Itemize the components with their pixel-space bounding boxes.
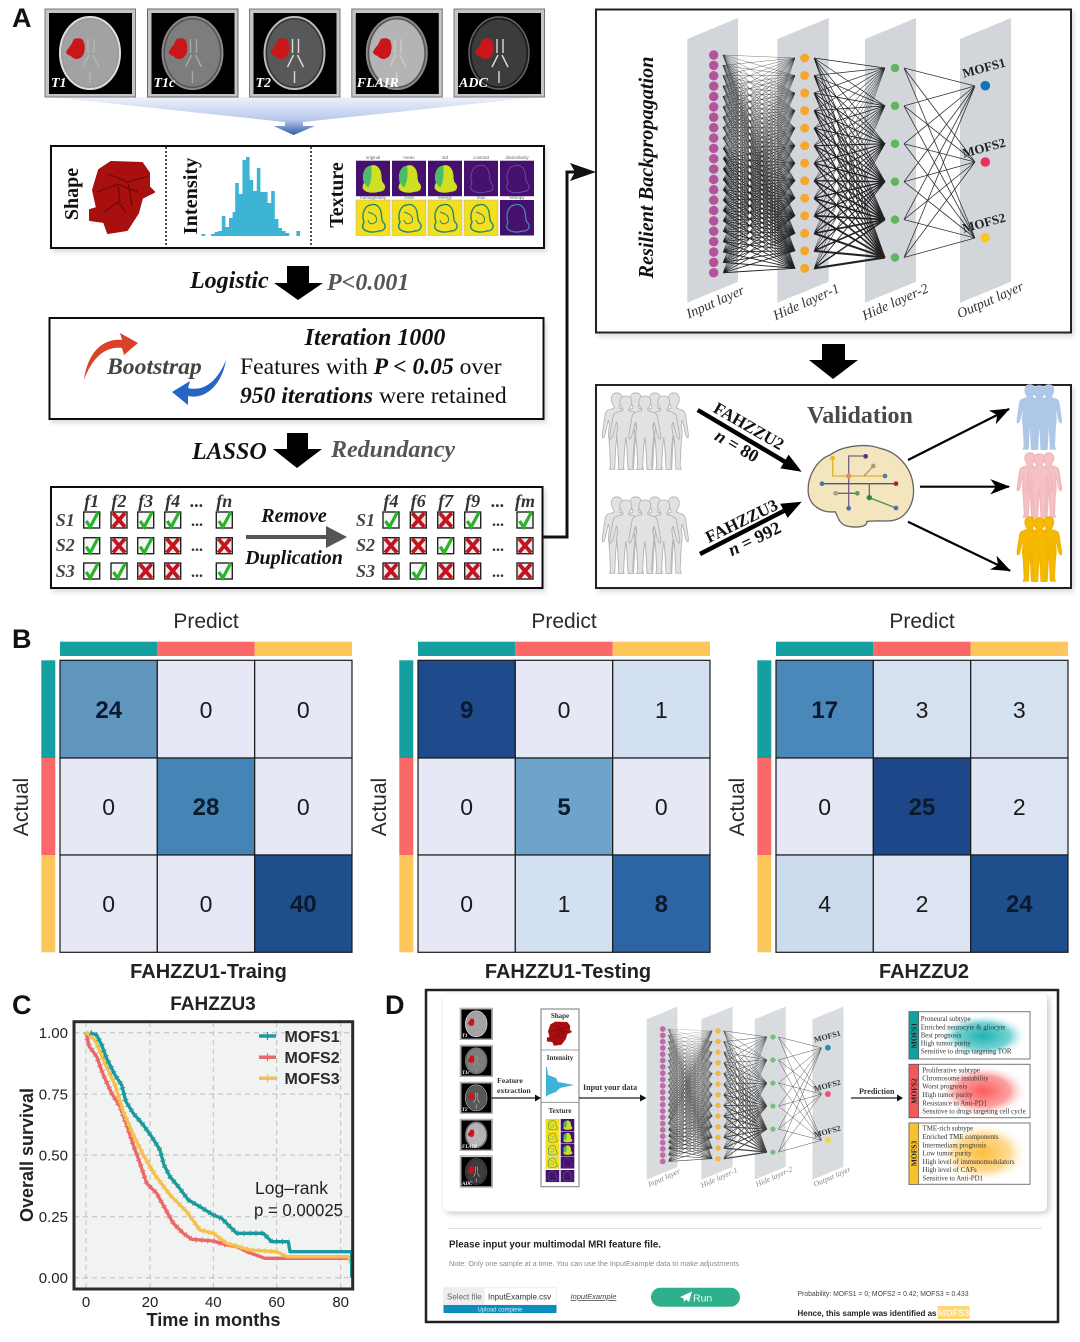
texture feature map grid: std [442, 155, 448, 160]
bootstrap box: Bootstrap [106, 354, 202, 380]
bootstrap box: Iteration 1000 [304, 325, 445, 351]
subtype card MOFS2: MOFS2 [910, 1078, 918, 1104]
left feature matrix: ... [190, 491, 204, 511]
MRI T1c: T1c [154, 76, 176, 91]
feature extraction arrow: extraction [497, 1086, 531, 1095]
cohort FAHZZU2 people [602, 393, 688, 469]
FAHZZU3 arrow: FAHZZU3 [702, 495, 781, 547]
texture feature map grid: ASM [404, 195, 414, 200]
matrix: training: 40 [290, 891, 317, 918]
network graph [687, 18, 1011, 486]
example link: InputExample [570, 1292, 616, 1301]
output labels: MOFS2 [961, 210, 1007, 236]
validation heading: Validation [807, 403, 913, 429]
output arrows [908, 409, 1010, 571]
MRI ADC: ADC [458, 76, 488, 91]
survival chart title: FAHZZU3 [170, 994, 256, 1015]
texture feature map grid: energy [438, 195, 453, 200]
subtype card MOFS2: High tumor purity [922, 1092, 973, 1099]
subtype card MOFS3 [909, 1123, 1030, 1184]
file selector [444, 1288, 556, 1314]
3D tumour shape [90, 162, 154, 233]
MRI T1c [148, 9, 238, 97]
log-rank annotation [254, 1178, 343, 1220]
input note: Note: Only one sample at a time. You can use the InputExample data to make adjustments [449, 1261, 740, 1268]
feature column: Intensity [547, 1054, 574, 1062]
matrix: testing: 0 [460, 794, 473, 820]
texture feature map grid: max [477, 195, 486, 200]
shape label: Shape [61, 168, 83, 220]
right feature matrix: f4 [384, 491, 398, 511]
run button: Run [693, 1292, 712, 1304]
mini MRI stack: T1c [462, 1071, 471, 1076]
FAHZZU2 arrow: n = 80 [712, 425, 762, 466]
remove duplication arrow: Duplication [244, 547, 343, 569]
x axis labels: 20 [142, 1294, 158, 1311]
FAHZZU3 arrow [700, 495, 802, 560]
right feature matrix: S3 [356, 561, 375, 581]
left feature matrix: S3 [56, 561, 75, 581]
down arrow [274, 266, 323, 300]
subtype card MOFS1: Proneural subtype [921, 1016, 971, 1023]
mini output labels: MOFS2 [813, 1124, 842, 1139]
right feature matrix: S1 [356, 510, 375, 530]
left feature matrix: f4 [165, 491, 180, 511]
y axis title: Overall survival [17, 1088, 37, 1222]
blue curved arrow [172, 360, 226, 405]
remove duplication arrow [244, 505, 347, 569]
matrix: FAHZZU2: Actual [726, 778, 749, 836]
left feature matrix: ... [191, 564, 203, 581]
MRI T1 [45, 9, 136, 97]
matrix: testing: FAHZZU1-Testing [485, 961, 651, 983]
input heading: Please input your multimodal MRI feature file. [449, 1240, 661, 1250]
matrix: testing: 0 [460, 891, 473, 917]
texture feature map grid: contrast [473, 155, 490, 160]
panel letter C: C [12, 990, 32, 1020]
x axis labels [82, 1294, 349, 1311]
FAHZZU2 arrow: FAHZZU2 [710, 398, 787, 454]
duplication removal box [51, 487, 542, 588]
logistic step: Logistic [189, 268, 269, 294]
result text: MOFS3 [938, 1308, 969, 1318]
output labels [961, 55, 1007, 236]
matrix: testing: 1 [655, 697, 668, 723]
result text: Hence, this sample was identified as [798, 1309, 937, 1318]
left feature matrix: f3 [138, 491, 153, 511]
subtype card MOFS2: Resistance to Anti-PD1 [922, 1100, 988, 1107]
matrix: FAHZZU2: 2 [1013, 794, 1026, 820]
bootstrap box [50, 318, 544, 419]
texture feature map grid: mean [403, 155, 415, 160]
matrix: training: 0 [200, 891, 212, 917]
prediction arrow: Prediction [859, 1087, 895, 1096]
right feature matrix: f9 [465, 491, 480, 511]
matrix: training: 0 [102, 891, 115, 917]
matrix: testing: Actual [368, 778, 391, 836]
legend: MOFS2 [284, 1050, 340, 1067]
layer labels: Hide layer-1 [770, 282, 842, 324]
right feature matrix: S2 [356, 535, 375, 555]
feature column: Texture [549, 1107, 571, 1115]
mini layer labels: Input layer [646, 1166, 682, 1189]
mini layer labels [646, 1164, 853, 1190]
subtype card MOFS1: MOFS1 [910, 1023, 918, 1048]
output labels: MOFS1 [961, 55, 1007, 81]
matrix: training: 28 [193, 794, 219, 821]
logistic step [189, 266, 409, 300]
intensity histogram [202, 157, 300, 236]
feature extraction arrow [492, 1076, 541, 1102]
survival curves [86, 1033, 352, 1278]
down arrow to validation [809, 344, 858, 379]
mini output labels: MOFS2 [813, 1078, 842, 1093]
matrix: testing: 9 [460, 697, 473, 724]
texture feature map grid: original [366, 155, 380, 160]
left feature matrix: f1 [84, 491, 99, 511]
MRI T1: T1 [51, 76, 67, 91]
feature column: Shape [551, 1012, 569, 1020]
legend: MOFS3 [284, 1071, 340, 1088]
network title: Resilient Backpropagation [634, 56, 658, 279]
matrix: FAHZZU2: 4 [818, 891, 831, 917]
matrix: FAHZZU2 [726, 610, 1068, 983]
survival chart [17, 1022, 353, 1330]
texture feature map grid: entropy [509, 195, 525, 200]
matrix: training [10, 610, 352, 983]
file selector: Upload complete [477, 1308, 523, 1314]
x axis labels: 80 [332, 1294, 349, 1311]
FAHZZU3 arrow: n = 992 [725, 517, 784, 560]
mini MRI stack: ADC [461, 1182, 473, 1187]
MRI T2 [250, 9, 340, 97]
log-rank annotation: Log–rank [255, 1178, 328, 1198]
layer labels: Hide layer-2 [859, 282, 931, 324]
mini MRI stack: FLAIR [462, 1145, 478, 1150]
mini output labels: MOFS1 [813, 1029, 842, 1044]
red curved arrow [84, 333, 138, 380]
matrix: FAHZZU2: 24 [1006, 891, 1033, 918]
matrix: training: Predict [173, 610, 239, 633]
funnel arrow under MRI images [50, 97, 538, 135]
matrix: training: 0 [200, 697, 212, 723]
right feature matrix [356, 491, 535, 581]
subtype card MOFS3: High level of immunomodulators [922, 1159, 1015, 1166]
matrix: testing: 5 [557, 794, 571, 821]
log-rank annotation: p = 0.00025 [254, 1200, 343, 1220]
file selector: InputExample.csv [488, 1292, 551, 1302]
MRI ADC [454, 9, 544, 97]
matrix: FAHZZU2: 17 [811, 697, 838, 724]
mini MRI stack: T2 [462, 1108, 468, 1113]
panel letter D: D [385, 990, 404, 1020]
probability text: Probability: MOFS1 = 0; MOFS2 = 0.42; MOFS3 = 0.433 [798, 1289, 968, 1298]
left feature matrix: f2 [112, 491, 126, 511]
matrix: training: 0 [297, 697, 310, 723]
pipeline card [443, 994, 1047, 1291]
left feature matrix: ... [191, 513, 203, 530]
subtype card MOFS1: High tumor purity [921, 1040, 971, 1047]
y axis labels [39, 1025, 68, 1287]
left feature matrix: fn [216, 491, 232, 511]
feature extraction arrow: Feature [497, 1076, 523, 1085]
panel B [10, 610, 1068, 983]
subtype card MOFS1: Best prognosis [921, 1032, 962, 1039]
matrix: testing: 1 [558, 891, 570, 917]
layer labels [683, 279, 1027, 324]
texture feature map grid: dissimilarity [505, 155, 529, 160]
feature column [541, 1009, 579, 1187]
subtype people: pink [1017, 453, 1061, 517]
right feature matrix: ... [492, 513, 504, 530]
subtype card MOFS2 [909, 1064, 1030, 1118]
matrix: training: 24 [95, 697, 123, 724]
output labels: MOFS2 [961, 135, 1007, 161]
matrix: FAHZZU2: 3 [1013, 697, 1026, 723]
matrix: FAHZZU2: 0 [818, 794, 831, 820]
remove duplication arrow: Remove [260, 505, 327, 527]
x axis title: Time in months [146, 1310, 281, 1330]
matrix: FAHZZU2: 3 [916, 697, 928, 723]
x axis labels: 40 [205, 1294, 222, 1311]
MRI FLAIR [352, 9, 442, 97]
x axis labels: 60 [268, 1294, 285, 1311]
matrix: testing [368, 610, 710, 983]
subtype card MOFS3: Low tumor purity [922, 1151, 972, 1158]
legend [259, 1029, 340, 1088]
left feature matrix: ... [191, 538, 203, 555]
matrix: training: 0 [102, 794, 115, 820]
panel: validation [596, 385, 1071, 588]
subtype people: blue [1017, 385, 1061, 449]
panel C [12, 990, 353, 1330]
MRI T2: T2 [256, 76, 271, 91]
panel D [385, 990, 1058, 1322]
subtype people: yellow [1017, 517, 1061, 581]
subtype card MOFS3: Intermediam prognosis [922, 1142, 987, 1149]
subtype card MOFS3: TME-rich subtype [922, 1126, 973, 1133]
panel: neural network [596, 10, 1071, 486]
right feature matrix: f7 [438, 491, 454, 511]
legend: MOFS1 [284, 1029, 340, 1046]
y axis labels: 0.25 [39, 1209, 68, 1226]
matrix: training: Actual [10, 778, 33, 836]
mini layer labels: Hide layer-2 [753, 1165, 794, 1189]
matrix: testing: 0 [655, 794, 668, 820]
panel letter A: A [12, 3, 32, 33]
matrix: training: FAHZZU1-Traing [130, 961, 287, 983]
matrix: training: 0 [297, 794, 310, 820]
bootstrap box: Features with P < 0.05 over [240, 354, 502, 380]
subtype card MOFS3: High level of CAFs [922, 1167, 977, 1174]
result text [798, 1306, 970, 1319]
mini MRI stack: T1 [462, 1034, 468, 1039]
left feature matrix: S2 [56, 535, 75, 555]
MRI modality images row [45, 9, 544, 135]
y axis labels: 0.50 [39, 1148, 68, 1164]
subtype card MOFS1: Sensitive to drugs targeting TOR [921, 1049, 1012, 1056]
subtype card MOFS1 [909, 1012, 1030, 1059]
panel A [12, 3, 1071, 588]
right feature matrix: f6 [411, 491, 426, 511]
layer labels: Input layer [683, 283, 747, 323]
connector arrow to network [543, 163, 596, 537]
left feature matrix: S1 [56, 510, 75, 530]
icon: paper plane [680, 1292, 692, 1302]
mini layer labels: Hide layer-1 [698, 1166, 739, 1190]
subtype card MOFS3: MOFS3 [910, 1141, 918, 1166]
mini neural network [647, 1007, 843, 1291]
input arrow: Input your data [583, 1083, 637, 1092]
right feature matrix: fm [515, 491, 535, 511]
subtype card MOFS1: Enriched neurocyte & gliocyte [921, 1024, 1005, 1031]
subtype card MOFS2: Sensitive to drugs targeting cell cycle [922, 1109, 1026, 1116]
down arrow [273, 433, 322, 468]
matrix: testing: 8 [655, 891, 668, 918]
cohort FAHZZU3 people [602, 497, 688, 573]
input arrow [579, 1083, 646, 1102]
prediction arrow [851, 1087, 903, 1102]
brain model [808, 446, 914, 527]
right feature matrix: ... [491, 491, 505, 511]
right feature matrix: ... [492, 538, 504, 555]
file selector: Select file [447, 1292, 482, 1302]
intensity label: Intensity [180, 158, 202, 234]
mini layer labels: Output layer [812, 1164, 853, 1189]
y axis labels: 1.00 [39, 1025, 68, 1042]
right feature matrix: ... [492, 564, 504, 581]
y axis labels: 0.75 [39, 1086, 68, 1104]
LASSO step: Redundancy [330, 437, 455, 463]
logistic step: P<0.001 [326, 270, 409, 296]
texture feature map grid: homogeneity [360, 195, 387, 200]
texture feature map grid [356, 155, 534, 236]
bootstrap box: 950 iterations were retained [240, 383, 507, 409]
mini MRI stack [460, 1008, 493, 1187]
subtype card MOFS3: Sensitive to Anti-PD1 [922, 1175, 984, 1182]
panel letter B: B [12, 624, 32, 654]
LASSO step [191, 433, 455, 468]
subtype card MOFS2: Worst prognosis [922, 1084, 967, 1091]
feature box: shape, intensity, texture [51, 146, 544, 248]
matrix: testing: 0 [558, 697, 570, 723]
matrix: testing: Predict [531, 610, 597, 633]
subtype card MOFS3: Enriched TME components [922, 1134, 999, 1141]
texture label: Texture [326, 162, 348, 228]
web tool frame [426, 990, 1058, 1322]
LASSO step: LASSO [191, 439, 267, 465]
run button [651, 1288, 740, 1307]
MRI FLAIR: FLAIR [356, 76, 399, 91]
left feature matrix [56, 491, 232, 581]
matrix: FAHZZU2: 2 [916, 891, 928, 917]
mini output labels [813, 1029, 842, 1139]
subtype card MOFS2: Proliferative subtype [922, 1067, 980, 1074]
x axis labels: 0 [82, 1294, 90, 1311]
layer labels: Output layer [955, 279, 1027, 322]
matrix: FAHZZU2: Predict [889, 610, 955, 633]
y axis labels: 0.00 [39, 1270, 68, 1287]
matrix: FAHZZU2: FAHZZU2 [879, 961, 969, 983]
matrix: FAHZZU2: 25 [909, 794, 935, 821]
FAHZZU2 arrow [698, 398, 802, 472]
subtype card MOFS2: Chromosome instability [922, 1076, 989, 1083]
